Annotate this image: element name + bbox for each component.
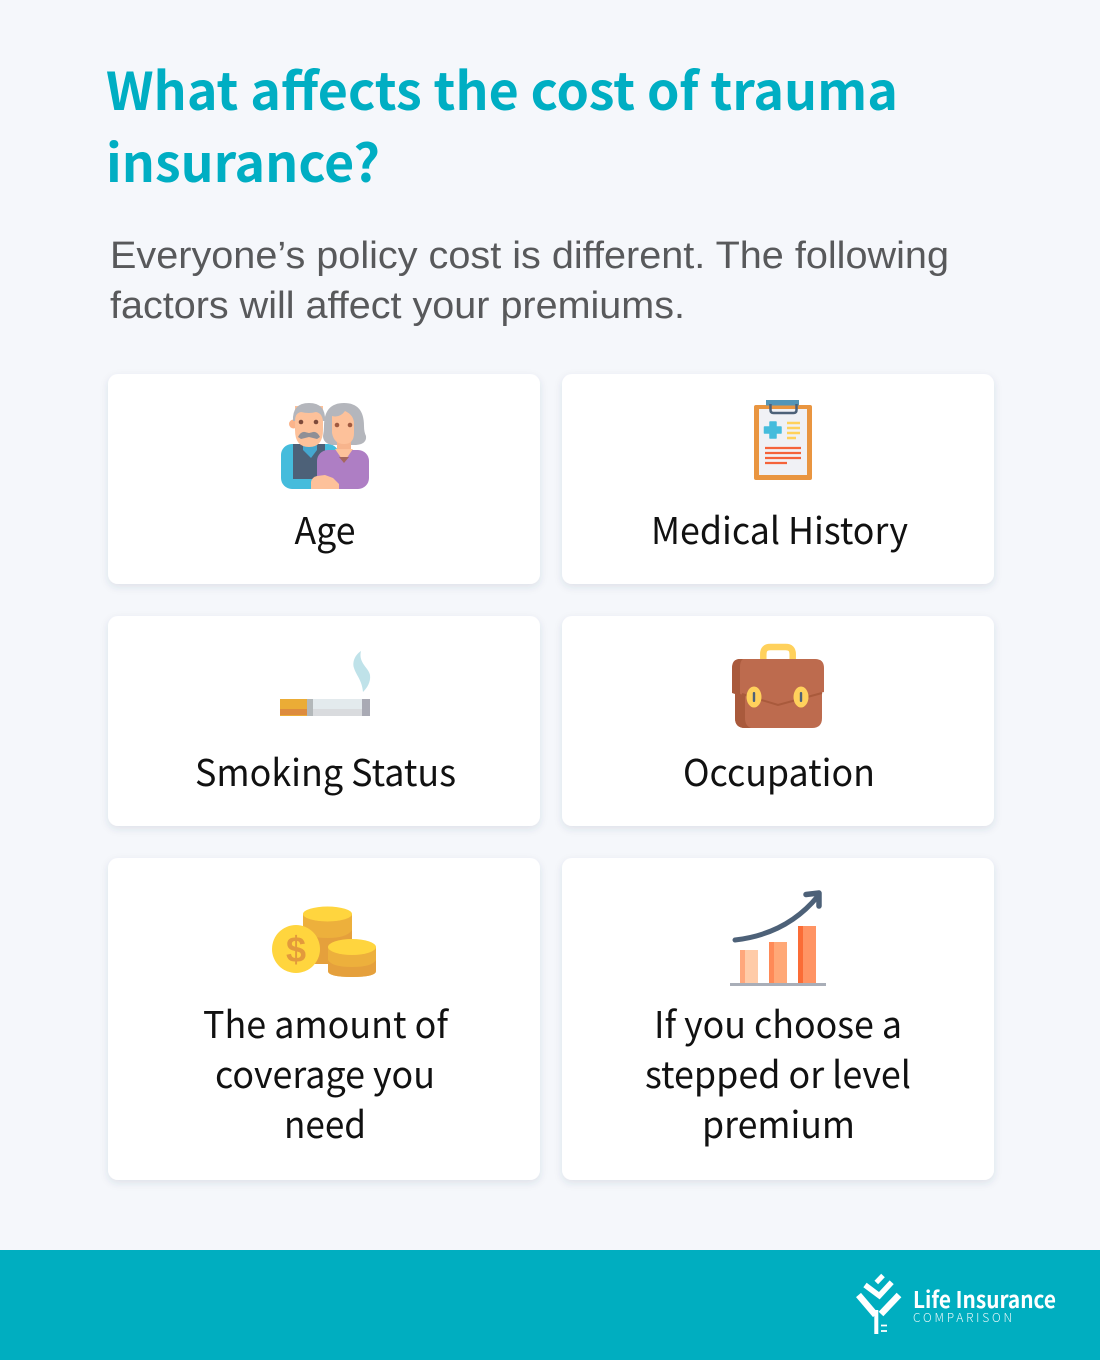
label: coverage you bbox=[215, 1045, 435, 1099]
intro text bbox=[110, 235, 949, 327]
panel: smoking status bbox=[108, 616, 540, 826]
label: Occupation bbox=[683, 743, 875, 797]
label: premium bbox=[702, 1095, 855, 1149]
icon: coins: $ bbox=[286, 929, 306, 970]
logo bbox=[858, 1276, 1056, 1334]
title bbox=[106, 50, 898, 197]
panel: age bbox=[108, 374, 540, 584]
label: Smoking Status bbox=[195, 743, 456, 797]
icon: briefcase bbox=[732, 647, 824, 728]
logo wordmark: COMPARISON bbox=[913, 1309, 1012, 1326]
label: If you choose a bbox=[654, 995, 902, 1049]
label: stepped or level bbox=[645, 1045, 911, 1099]
icon: elderly couple bbox=[281, 403, 369, 489]
label: Medical History bbox=[651, 501, 908, 555]
icon: clipboard bbox=[754, 400, 812, 480]
footer band bbox=[0, 1250, 1100, 1360]
intro text: factors will affect your premiums. bbox=[110, 285, 685, 327]
icon: coins bbox=[272, 906, 376, 977]
title: What affects the cost of trauma bbox=[106, 50, 898, 125]
title: insurance? bbox=[106, 122, 380, 197]
label: Age bbox=[294, 501, 356, 555]
label bbox=[645, 995, 911, 1149]
icon: rising bar chart bbox=[730, 893, 826, 984]
panel: coverage amount bbox=[108, 858, 540, 1180]
intro text: Everyone’s policy cost is different. The following bbox=[110, 235, 949, 277]
label: The amount of bbox=[203, 995, 450, 1049]
label bbox=[203, 995, 450, 1149]
panel: occupation bbox=[562, 616, 994, 826]
panel: medical history bbox=[562, 374, 994, 584]
icon: cigarette bbox=[280, 651, 370, 716]
logo wordmark: Life Insurance bbox=[913, 1281, 1056, 1315]
label: need bbox=[284, 1095, 366, 1149]
panel: stepped or level premium bbox=[562, 858, 994, 1180]
logo mark bbox=[858, 1276, 899, 1334]
